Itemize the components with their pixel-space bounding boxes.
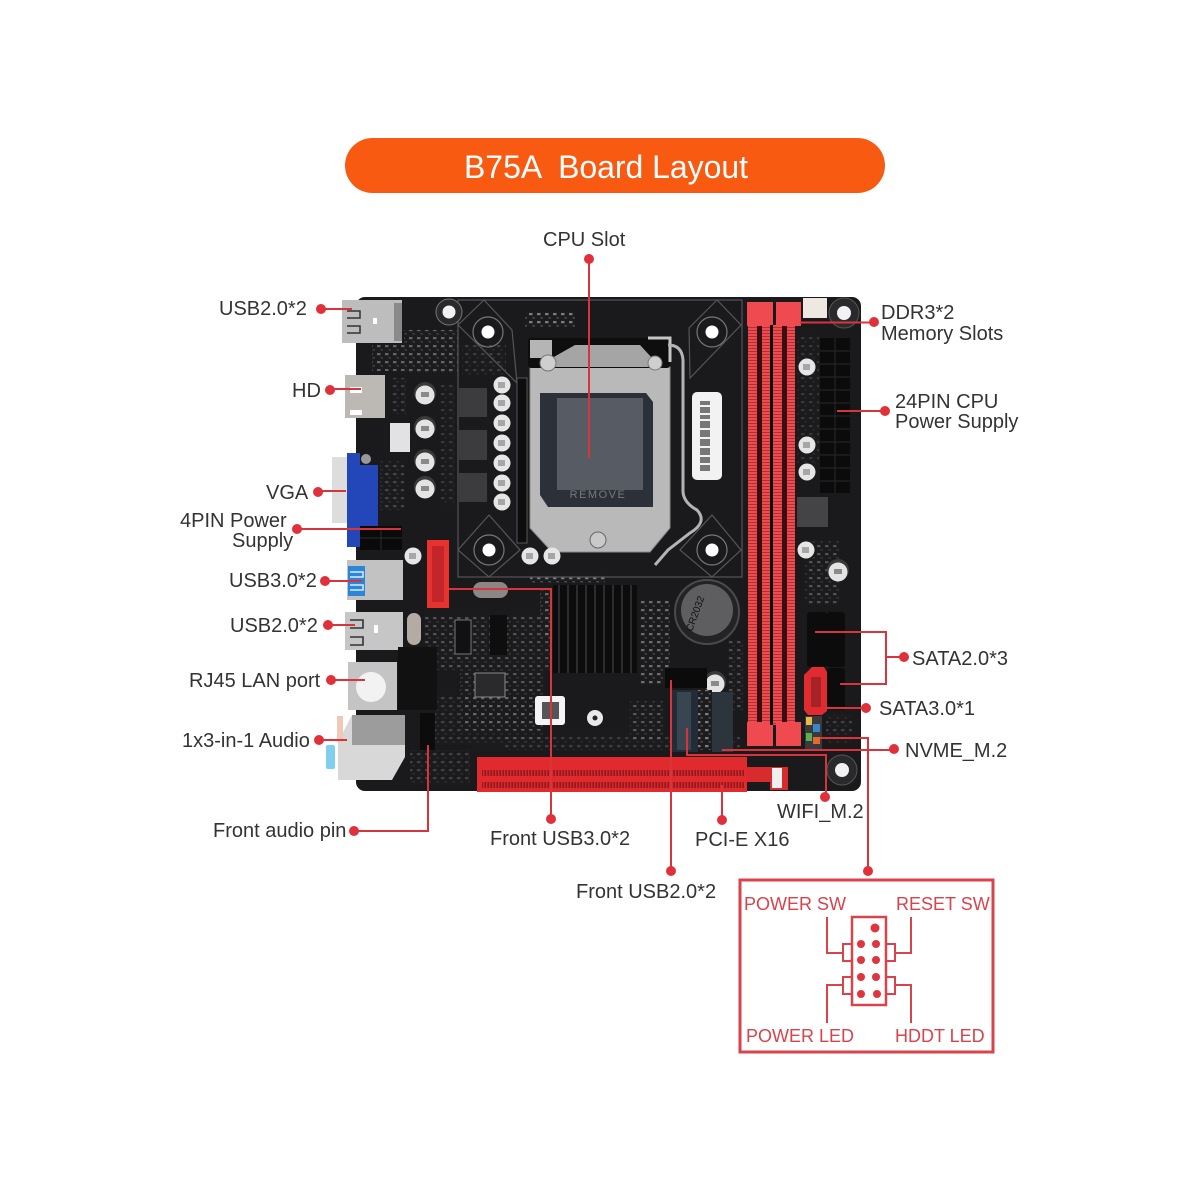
leader: front audio (349, 745, 428, 836)
24pin connector (820, 338, 850, 493)
label: 24pin (895, 391, 1018, 433)
leader: 4pin power (292, 524, 401, 534)
label: usb2.0 top: USB2.0*2 (219, 298, 307, 320)
label: 24pin: 24PIN CPU (895, 391, 998, 413)
title banner (345, 138, 885, 193)
wifi/nvme m.2 slots (665, 668, 733, 752)
label: 24pin: Power Supply (895, 411, 1018, 433)
pins (857, 924, 881, 998)
label: vga: VGA (266, 482, 309, 504)
label: ddr3 (881, 302, 1003, 345)
pin labels: RESET SW (896, 894, 990, 914)
leader: usb2.0 top (316, 304, 352, 314)
leader: wifi (687, 728, 830, 802)
label: front usb3.0: Front USB3.0*2 (490, 828, 630, 850)
leader: audio (314, 735, 347, 745)
front panel pins (805, 716, 822, 750)
heatsink (553, 585, 637, 673)
leader: sata3.0 (825, 703, 871, 713)
rear io: hdmi (345, 375, 385, 418)
leader: 24pin (837, 406, 890, 416)
pcie x16 slot (477, 757, 788, 792)
leader: ddr3 (800, 317, 879, 327)
sata ports (804, 612, 845, 715)
leader: usb3.0 (320, 576, 362, 586)
white corner connector (803, 298, 827, 318)
label: audio: 1x3-in-1 Audio (182, 730, 310, 752)
label: ddr3: DDR3*2 (881, 302, 954, 324)
rear io: usb 3.0 (347, 560, 403, 600)
leader: hd (325, 385, 361, 395)
leader: front usb2.0 (666, 680, 676, 876)
label: usb3.0: USB3.0*2 (229, 570, 317, 592)
label: rj45: RJ45 LAN port (189, 670, 321, 692)
mounting holes (436, 298, 859, 785)
ddr3 slots (747, 302, 801, 746)
front usb 3.0 header (427, 540, 449, 608)
panel: front panel header diagram (740, 880, 993, 1052)
leader: front usb3.0 (449, 589, 556, 824)
rear io: usb 2.0 (345, 612, 403, 650)
label: nvme: NVME_M.2 (905, 740, 1007, 762)
label: front audio: Front audio pin (213, 820, 346, 842)
rear io: rj45 (348, 647, 437, 710)
label: cpu slot: CPU Slot (543, 229, 626, 251)
rear io: audio (326, 715, 405, 780)
silver crystals, qr label, chips (407, 582, 603, 750)
leader: sata2.0 (815, 632, 909, 684)
label: 4pin power supply (180, 510, 293, 552)
pin labels: POWER LED (746, 1026, 854, 1046)
label: wifi: WIFI_M.2 (777, 801, 864, 823)
cpu socket (528, 338, 701, 565)
leader: usb2.0 lower (323, 620, 355, 630)
label: usb2.0 lower: USB2.0*2 (230, 615, 318, 637)
silkscreen cpu area (458, 300, 742, 577)
leader: pci-e (717, 785, 727, 825)
coin battery (675, 580, 739, 644)
label: 4pin power supply: 4PIN Power (180, 510, 287, 532)
leader: cpu slot (584, 254, 594, 458)
coin battery: CR2032 (684, 594, 708, 633)
rear io: vga (332, 453, 378, 547)
leader: vga (313, 487, 346, 497)
pin header (827, 917, 911, 1023)
rear io: usb 2.0 top (342, 300, 402, 343)
cpu socket: REMOVE (570, 489, 626, 501)
label: front usb2.0: Front USB2.0*2 (576, 881, 716, 903)
smd component areas (372, 312, 852, 785)
motherboard (326, 297, 861, 792)
label: ddr3: Memory Slots (881, 323, 1003, 345)
leader: nvme (722, 744, 899, 754)
pin labels: POWER SW (744, 894, 846, 914)
pin labels: HDDT LED (895, 1026, 985, 1046)
label: sata2.0: SATA2.0*3 (912, 648, 1008, 670)
vrm inductors and capacitors (390, 358, 849, 694)
label: 4pin power supply: Supply (232, 530, 293, 552)
label: hd: HD (292, 380, 321, 402)
leader: rj45 (326, 675, 365, 685)
title banner: B75A Board Layout (464, 149, 748, 185)
label: pci-e: PCI-E X16 (695, 829, 789, 851)
board base (356, 297, 861, 791)
leader: front panel (820, 738, 873, 876)
serial label (692, 392, 722, 480)
label: sata3.0: SATA3.0*1 (879, 698, 975, 720)
pin labels (744, 894, 990, 1046)
4pin power connector (360, 526, 402, 550)
